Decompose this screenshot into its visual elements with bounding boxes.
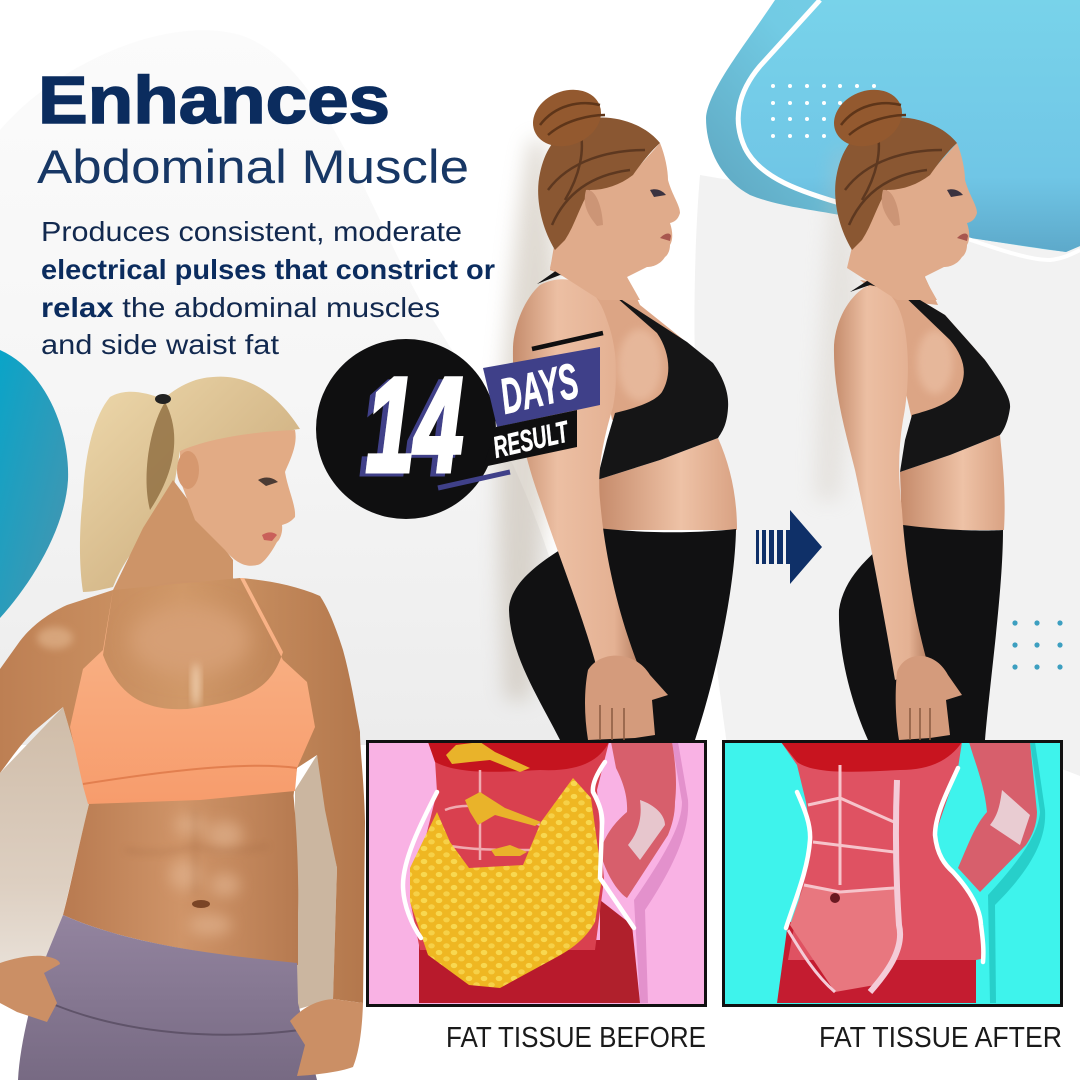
description text: electrical pulses that constrict or — [41, 254, 495, 285]
panel: fat tissue before — [368, 742, 706, 1006]
belly — [900, 435, 1005, 530]
dot grid: top right — [771, 84, 876, 138]
chest — [428, 742, 609, 772]
fat chest patch — [446, 742, 530, 772]
fat small patch — [491, 845, 527, 856]
finger lines — [910, 708, 930, 740]
abs shading — [125, 810, 268, 895]
arm highlight — [628, 800, 665, 860]
eye — [258, 478, 278, 486]
arm shadow — [988, 742, 1045, 1003]
head — [524, 80, 680, 300]
blob: left teal shape — [0, 350, 68, 618]
result label: RESULT — [490, 415, 573, 465]
finger lines — [600, 705, 624, 740]
orange sports bra — [70, 578, 315, 804]
title — [37, 63, 469, 193]
hair — [835, 117, 957, 250]
lower body — [777, 922, 976, 1003]
chest highlight — [618, 329, 662, 401]
side stripe — [870, 780, 900, 992]
bun — [825, 80, 911, 156]
figure: fit woman — [0, 377, 365, 1080]
result ribbon — [483, 410, 577, 467]
wall behind right side — [295, 755, 337, 1010]
title: Enhances — [38, 63, 390, 138]
hair band — [155, 394, 171, 404]
figure: woman before — [498, 80, 737, 740]
arm muscle — [958, 742, 1037, 892]
hair strands — [548, 130, 645, 225]
arrow — [756, 510, 822, 584]
navel — [830, 893, 840, 903]
sports bra — [850, 279, 1010, 472]
lips — [957, 234, 968, 241]
white outlines — [786, 768, 983, 962]
white outlines — [403, 762, 634, 938]
abs lines — [445, 770, 540, 860]
hand — [896, 656, 962, 740]
description text — [41, 216, 495, 360]
frame — [368, 742, 706, 1006]
hand — [585, 656, 668, 740]
description text: Produces consistent, moderate — [41, 216, 462, 247]
caption: after: FAT TISSUE AFTER — [819, 1022, 1062, 1054]
groin line — [788, 930, 835, 992]
waistband line — [55, 1005, 300, 1035]
face — [847, 143, 977, 300]
fat middle patch — [465, 792, 541, 826]
leggings — [839, 525, 1003, 740]
face — [550, 143, 680, 300]
black circle — [316, 339, 496, 519]
ear — [177, 451, 199, 489]
head — [825, 80, 977, 300]
shorts — [18, 915, 317, 1080]
belly — [597, 438, 737, 530]
hair shadow — [146, 402, 174, 510]
blob: top right blue shape — [706, 0, 1080, 260]
abs highlights — [169, 815, 243, 936]
arm shadow — [634, 742, 688, 1003]
frame — [724, 742, 1062, 1006]
fat deposit — [410, 778, 602, 988]
arm — [513, 279, 640, 680]
neck and chest — [853, 240, 985, 420]
chest — [781, 742, 962, 772]
badge: 14 days result — [316, 333, 603, 519]
panel: fat tissue after — [724, 742, 1062, 1006]
dot grid: lower right — [1012, 620, 1063, 670]
lips — [660, 234, 671, 241]
hair strands — [845, 130, 942, 225]
ponytail and hair — [80, 377, 300, 592]
shoulder highlight left — [37, 627, 73, 649]
neck and chest — [550, 240, 690, 420]
lips — [262, 532, 277, 541]
arm — [834, 286, 928, 680]
neck — [113, 480, 250, 610]
sports bra — [537, 270, 728, 480]
bun strands — [540, 103, 605, 135]
abs lines — [804, 765, 894, 892]
hip muscle — [600, 900, 640, 1003]
description text: relax the abdominal muscles — [41, 292, 440, 323]
number 14: 14 — [366, 351, 463, 500]
torso muscle — [781, 742, 985, 960]
days ribbon — [483, 347, 600, 427]
eye — [650, 189, 666, 197]
bun — [524, 80, 610, 156]
right hand — [290, 999, 363, 1076]
bun strands — [841, 103, 906, 135]
face — [180, 430, 296, 566]
caption: before: FAT TISSUE BEFORE — [446, 1022, 706, 1054]
wall behind left side — [0, 707, 90, 1000]
hair — [538, 117, 660, 250]
description text: and side waist fat — [41, 329, 279, 360]
wall shadow — [498, 140, 560, 700]
chest shine — [192, 663, 200, 707]
arm muscle — [600, 742, 676, 898]
days label: DAYS — [495, 353, 583, 425]
chest highlight — [917, 330, 953, 394]
arm highlight — [990, 790, 1030, 845]
wall shadow — [815, 150, 860, 500]
abdomen — [63, 790, 298, 965]
upper body — [0, 578, 365, 1003]
lower body — [419, 940, 636, 1003]
figure: woman after — [815, 80, 1010, 740]
eye — [947, 189, 963, 197]
leggings — [509, 528, 736, 740]
ear — [882, 190, 900, 226]
accent line top — [532, 333, 603, 349]
torso muscle — [410, 742, 609, 950]
accent line bottom — [438, 472, 510, 488]
chest highlight — [130, 605, 250, 675]
ear — [585, 190, 603, 226]
left hand — [0, 956, 60, 1022]
bra band line — [83, 766, 297, 784]
lower abdomen — [790, 885, 899, 992]
navel — [192, 900, 210, 908]
title: Abdominal Muscle — [37, 140, 469, 193]
